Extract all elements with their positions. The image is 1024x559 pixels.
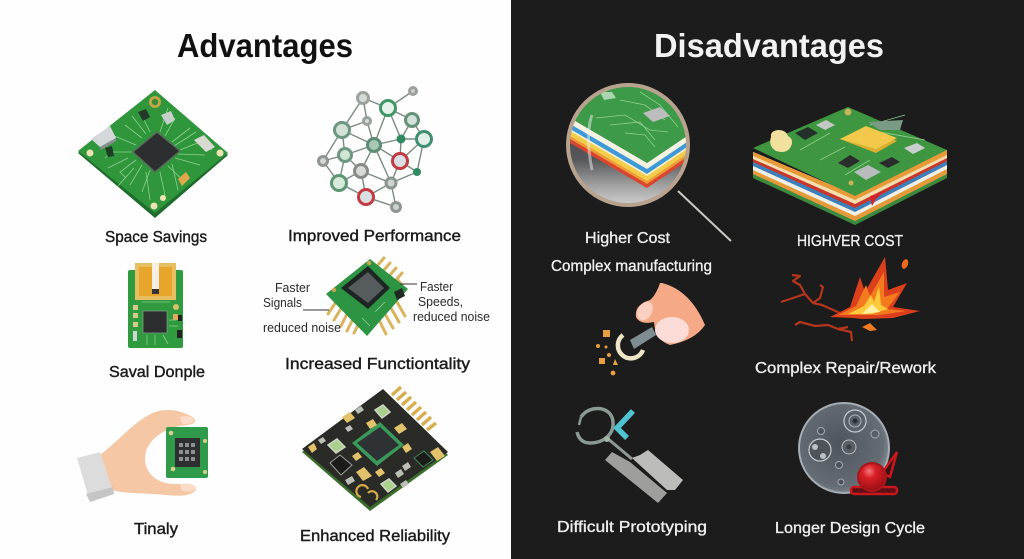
sparks [596,330,618,375]
sub components [308,412,445,481]
label: Complex Repair/Rework [755,360,937,377]
heading: Disadvantages: Disadvantages [654,27,884,64]
item: complex repair [596,257,937,377]
icon: magnifier over PCB layers [565,80,731,241]
callout: faster signals: Faster [275,280,311,295]
icon: flame with cracks [781,257,920,341]
solder blob [770,130,792,152]
item: saval dongle [109,263,205,381]
chip [143,311,167,333]
panel: advantages [0,0,511,559]
icon: layered PCB stack [753,107,947,225]
label: Difficult Prototyping [557,519,707,536]
callout: faster signals: Signals [263,295,302,310]
callout: faster speeds: Faster [420,279,454,294]
label: Enhanced Reliability [300,528,450,545]
callout: faster speeds [400,279,490,324]
components [795,127,818,140]
icon: hand holding chip [77,410,208,502]
callout: faster speeds: reduced noise [413,309,490,324]
icon: chip with gold pins [263,258,490,336]
label: Tinaly [134,521,178,538]
item: enhanced reliability [300,387,450,545]
cuff [77,452,114,502]
microchip [132,131,181,173]
label: Longer Design Cycle [775,520,925,537]
icon: dark circuit board [302,387,448,511]
label: complex manufacturing: Complex manufacturing [551,258,712,275]
icon: clamp tool [577,408,683,503]
item: longer design cycle [775,403,925,537]
label: Increased Functiontality [285,356,470,373]
item: tinaly [77,410,208,538]
item: space savings [78,90,228,246]
pads [133,305,138,327]
callout: faster speeds: Speeds, [418,294,463,309]
icon: dongle board [128,263,183,348]
heading: Advantages: Advantages [177,27,353,64]
panel: disadvantages [511,0,1024,559]
label: Space Savings [105,229,207,246]
icon: petri dish with red marker [799,403,897,494]
label: Saval Donple [109,364,205,381]
label: higher cost: Higher Cost [585,230,671,247]
mounting pads [149,96,161,108]
item: improved performance [288,88,461,245]
connector [91,126,116,147]
green chip halo [352,422,404,466]
item: increased functionality [263,258,490,373]
item: layered board [753,107,947,250]
label: HIGHVER COST [797,233,903,250]
icon: green circuit board [78,90,228,218]
item: higher cost magnifier [551,80,731,275]
gold chip [840,128,897,153]
item: difficult prototyping [557,408,707,536]
gold connector [135,263,176,300]
label: Improved Performance [288,228,461,245]
callout: faster signals [263,280,341,335]
icon: node network [318,88,432,212]
icon: finger with tool [596,283,705,375]
callout: faster signals: reduced noise [263,320,341,335]
small board [166,427,208,478]
components [161,111,175,125]
